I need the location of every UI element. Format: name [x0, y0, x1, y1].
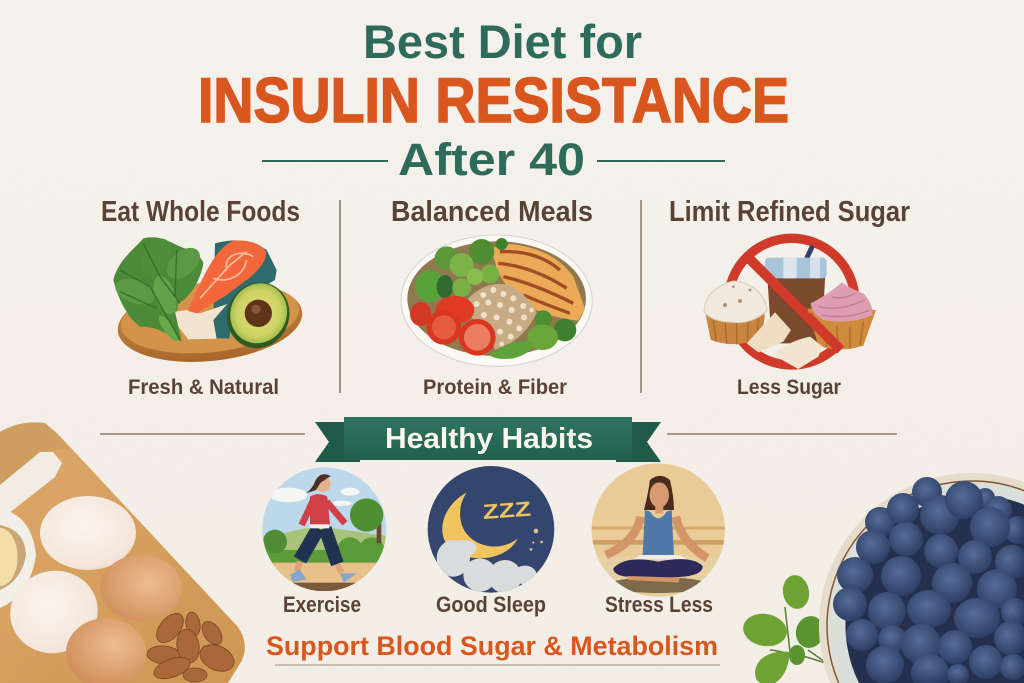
- photo: cutting board with eggs and almonds: [0, 422, 245, 683]
- caption: good sleep: Good Sleep: [436, 592, 546, 617]
- title: After 40: [398, 134, 585, 185]
- almonds: [146, 609, 238, 683]
- banner: healthy habits: Healthy Habits: [385, 423, 593, 455]
- tomatoes: [410, 302, 431, 326]
- title: INSULIN RESISTANCE: [198, 66, 789, 136]
- slash overlap on cupcake: [807, 316, 841, 350]
- right cupcake: [807, 308, 876, 349]
- icon: crossed out sweets: [704, 238, 876, 369]
- icon: good sleep: ZZZ: [482, 498, 532, 524]
- panel: eat whole foods: [101, 196, 306, 399]
- heading: balanced meals: Balanced Meals: [391, 196, 593, 228]
- caption: fresh and natural: Fresh & Natural: [128, 376, 279, 399]
- straw: [807, 246, 813, 258]
- banner: healthy habits: [315, 417, 661, 462]
- caption: less sugar: Less Sugar: [737, 376, 841, 399]
- avocado: [216, 272, 300, 358]
- icon: plate with greens, salmon and avocado: [112, 233, 306, 370]
- eggs: [40, 496, 136, 570]
- divider: [640, 200, 642, 393]
- caption: protein and fiber: Protein & Fiber: [423, 376, 567, 399]
- leafy greens: [112, 233, 206, 344]
- chicken: [490, 244, 585, 321]
- greens: [415, 270, 445, 302]
- red slash: [747, 257, 841, 350]
- caption: exercise: Exercise: [283, 592, 361, 617]
- photo: blueberry bowl: [819, 473, 1024, 683]
- icon: good sleep: [428, 466, 554, 593]
- panel: limit refined sugar: [669, 196, 910, 399]
- cup: [767, 267, 826, 343]
- egg cup: [0, 509, 36, 608]
- white chocolate pieces: [747, 312, 791, 352]
- heading: limit refined sugar: Limit Refined Sugar: [669, 196, 910, 228]
- salmon: [213, 240, 277, 338]
- icon: bowl with chicken, broccoli, quinoa and tomatoes: [401, 235, 592, 366]
- photo: mint sprig: [741, 573, 829, 683]
- title: [198, 15, 789, 185]
- heading: eat whole foods: Eat Whole Foods: [101, 196, 300, 228]
- title: Best Diet for: [363, 15, 642, 68]
- walker: [300, 528, 318, 560]
- icon: stress less: [590, 460, 727, 600]
- greens bottom right: [535, 310, 552, 328]
- tagline: Support Blood Sugar & Metabolism: [266, 631, 718, 661]
- left cupcake: [706, 314, 765, 344]
- section lines: [100, 433, 305, 435]
- caption: stress less: Stress Less: [605, 592, 713, 617]
- panel: balanced meals: [391, 196, 593, 399]
- divider: [339, 200, 341, 393]
- icon: exercise: [260, 467, 390, 593]
- quinoa: [468, 284, 537, 350]
